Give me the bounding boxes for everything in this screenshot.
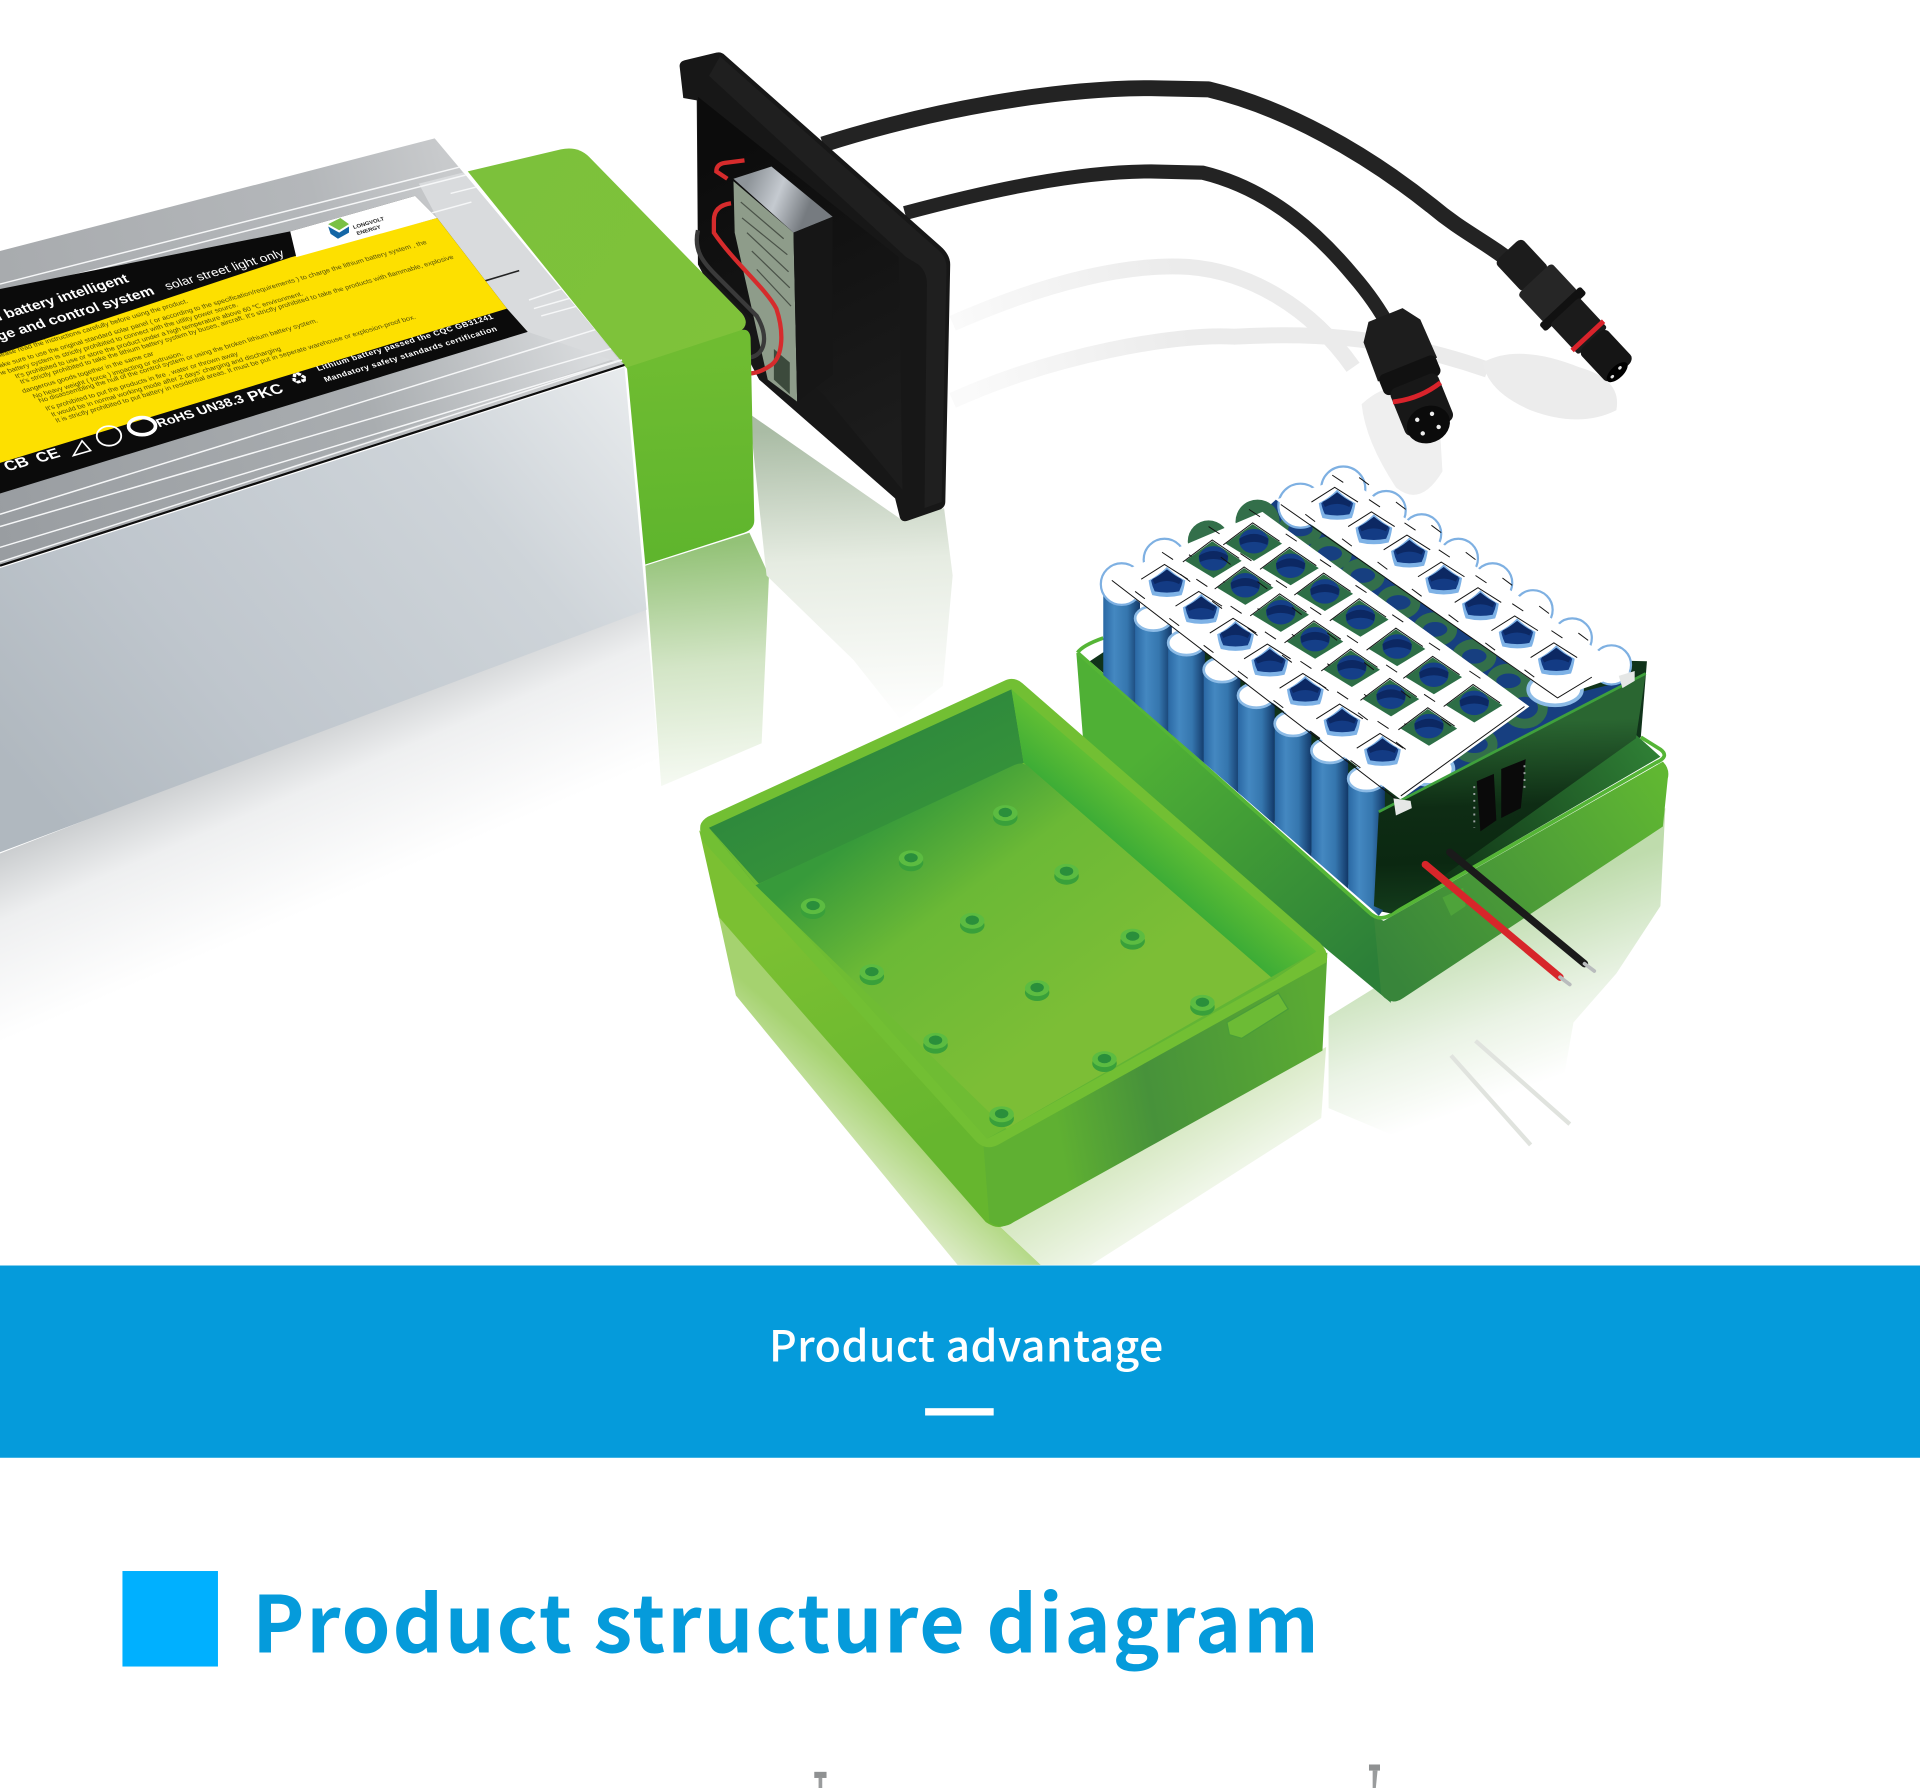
circuit board xyxy=(1374,673,1646,913)
label: warning text: No heavy weight ( force ) impacting or extrusion. xyxy=(32,351,185,400)
logo mark: LONGVOLT xyxy=(352,216,386,231)
enclosure: rim xyxy=(1078,653,1664,918)
housing: top face xyxy=(0,138,624,566)
green cap: top xyxy=(468,148,746,369)
enclosure: interior xyxy=(1090,649,1647,913)
green lid xyxy=(699,679,1327,1227)
band title: Product advantage xyxy=(769,1313,1163,1375)
panel frame xyxy=(680,52,950,521)
panel rim highlight xyxy=(709,56,947,508)
lid: rim xyxy=(700,679,1327,1147)
label: warning text: It is strictly prohibited to put battery in residential areas. It must be put in seperate warehouse or explosion-proof box. xyxy=(54,314,417,424)
label: warning text: It's prohibited to use or store the product under a high temperature above 60 ℃ environment. xyxy=(14,291,305,380)
screw: right xyxy=(1369,1764,1380,1788)
label: certification marks: CE xyxy=(33,446,63,466)
enclosure: right outer wall xyxy=(1374,762,1668,1001)
nickel strip: back row xyxy=(1276,475,1630,698)
label: certification marks: CB xyxy=(1,454,32,475)
panel interior xyxy=(698,97,902,490)
label: warning text: No disassembling the hull of the control system or using the broken lithium battery system. xyxy=(37,318,319,404)
label: compliance text: Lithium battery passed the CQC GB31241 xyxy=(315,313,495,373)
nickel tabs xyxy=(1393,671,1635,816)
warning label xyxy=(0,196,528,493)
latch xyxy=(1442,888,1466,916)
label: black sheet xyxy=(0,196,528,493)
green cap: front xyxy=(627,330,754,564)
power leads xyxy=(1425,852,1594,984)
housing: lower top band xyxy=(0,332,618,563)
cell row: side view xyxy=(1103,596,1385,916)
connector: left xyxy=(1356,303,1466,453)
label: certification marks: RoHS xyxy=(153,407,197,430)
logo mark xyxy=(328,216,386,239)
controller module xyxy=(733,167,833,402)
band underline xyxy=(925,1408,994,1416)
label: warning text: dangerous goods together in the same car xyxy=(21,351,156,395)
label: yellow area xyxy=(0,218,507,463)
label: compliance text: Mandatory safety standards certification xyxy=(322,325,499,384)
screw: left xyxy=(814,1772,827,1788)
wires xyxy=(697,160,781,373)
cell top crescents xyxy=(1135,606,1385,791)
label: product note: solar street light only xyxy=(161,246,287,293)
open battery enclosure with cell pack xyxy=(1076,465,1668,1003)
lid: left outer wall xyxy=(699,830,1007,1227)
section heading: Product structure diagram xyxy=(252,1561,1319,1675)
housing: side face xyxy=(0,367,647,852)
label: warning text: It's strictly prohibited to take the lithium battery system by buses, aircraft. It's strictly prohibited to take the products with flammable, explosive xyxy=(19,254,455,386)
lid: right inner wall xyxy=(1011,689,1316,980)
chip pins xyxy=(1474,765,1524,828)
section marker square xyxy=(122,1571,218,1667)
chips xyxy=(1477,759,1526,831)
scalloped cell edges xyxy=(1101,467,1631,684)
floor reflections xyxy=(0,266,1665,1265)
label: certification marks: UN38.3 xyxy=(194,392,247,418)
label: certification marks: PKC xyxy=(244,381,287,405)
lid: mounting posts xyxy=(801,805,1215,1127)
cable: upper xyxy=(823,88,1516,266)
connector: right xyxy=(1487,231,1644,394)
cell tops behind sheets xyxy=(1262,500,1646,823)
lid: back inner wall xyxy=(709,689,1024,885)
lid: floor xyxy=(756,764,1271,1129)
label: white logo block xyxy=(290,196,437,257)
nickel strip: front sheet xyxy=(1107,509,1529,801)
lid: right outer wall xyxy=(983,953,1327,1226)
label: warning text: Make sure to use the original standard solar panel ( or according to the specification/requirements ) to charge the lithium battery system , the xyxy=(0,240,428,371)
label: warning text: It would be in normal working mode after 2 days' charging and discharging xyxy=(50,346,283,418)
label: warning text xyxy=(0,240,455,424)
band: product advantage xyxy=(0,1266,1920,1458)
black end cover panel with cables xyxy=(680,52,1644,521)
label: certification marks xyxy=(1,368,313,475)
enclosure: left outer wall xyxy=(1076,653,1391,1003)
label: warning text: It's prohibited to put the products in fire , water or thrown away xyxy=(44,351,240,412)
housing: light end section xyxy=(419,171,622,364)
label: certification marks: ♻ xyxy=(286,368,313,390)
silver battery housing with green end cap xyxy=(0,138,754,852)
lid: latch notch xyxy=(1227,993,1288,1038)
cable: lower xyxy=(905,171,1390,328)
logo mark: ENERGY xyxy=(356,225,382,237)
lid: front inner wall xyxy=(709,828,1007,1139)
